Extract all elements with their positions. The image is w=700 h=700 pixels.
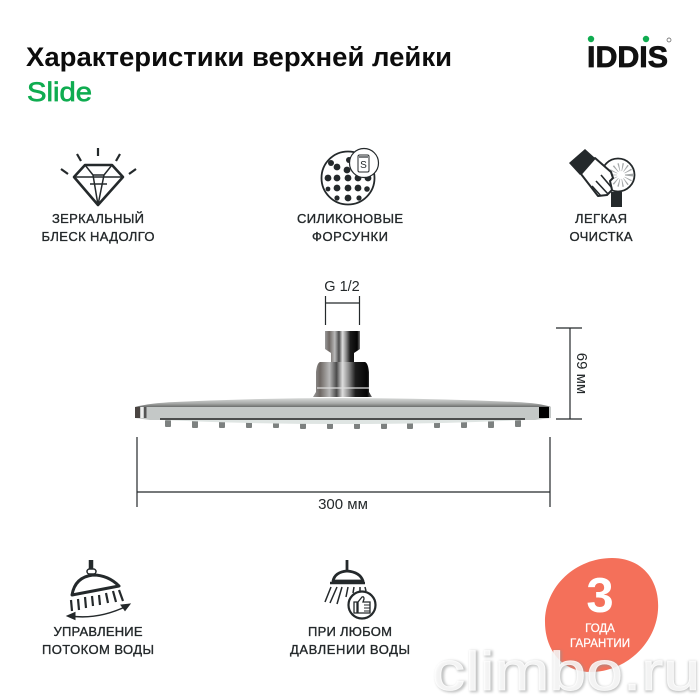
badge text: ГОДА [585,623,615,635]
badge text: ГАРАНТИИ [570,638,630,650]
icon: nozzle disc: S [360,160,367,171]
icon: hand wiping shower head [569,149,634,207]
label: any pressure: ДАВЛЕНИИ ВОДЫ [290,642,410,657]
title: Характеристики верхней лейки [26,42,452,72]
label: any pressure: ПРИ ЛЮБОМ [308,624,392,639]
badge blob [545,558,658,672]
end caps [135,407,140,418]
label: easy cleaning: ОЧИСТКА [570,229,633,244]
label: flow control: УПРАВЛЕНИЕ [54,624,143,639]
dimension: 300 mm: 300 мм [318,496,368,513]
logo: IDDIS: IDDIS [587,41,668,74]
panel: any pressure [290,560,410,657]
badge: 3 year warranty [545,558,658,672]
label: mirror shine: ЗЕРКАЛЬНЫЙ [52,211,144,226]
head plate [135,398,551,424]
dimension: G 1/2: G 1/2 [324,279,360,295]
subtitle: Slide: Slide [27,77,92,107]
dimension: 69 mm: 69 мм [573,353,590,394]
badge number: 3 [586,569,614,623]
label: easy cleaning: ЛЕГКАЯ [575,211,627,226]
neck [325,331,360,362]
label: silicone nozzles: ФОРСУНКИ [312,229,388,244]
base [313,362,372,397]
product: shower head [135,331,551,429]
label: mirror shine: БЛЕСК НАДОЛГО [42,229,154,244]
label: silicone nozzles: СИЛИКОНОВЫЕ [297,211,403,226]
label: flow control: ПОТОКОМ ВОДЫ [42,642,154,657]
panel: easy cleaning [569,149,634,244]
icon: shower with thumbs up [325,560,376,618]
panel: flow control [42,560,154,657]
icon: diamond [61,148,136,205]
panel: silicone nozzles [297,148,403,244]
dimension: 300 mm [137,437,550,513]
dimension: 69 mm [556,328,590,419]
icon: shower with flow arc [67,560,130,620]
nozzles [165,420,521,429]
dimension: G 1/2 [324,279,360,325]
panel: mirror shine [42,148,154,244]
